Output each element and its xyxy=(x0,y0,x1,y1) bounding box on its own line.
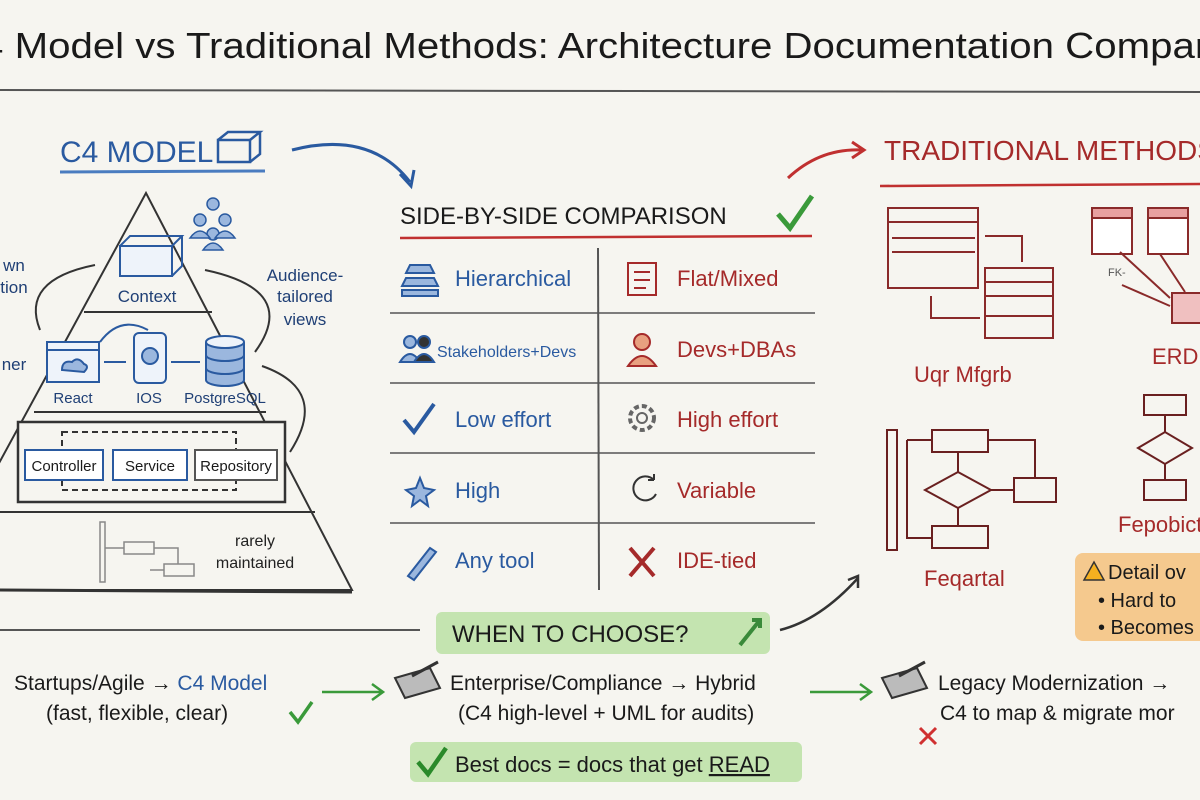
pyramid xyxy=(0,193,352,592)
people icon xyxy=(190,198,235,250)
text: FK- xyxy=(1108,267,1126,279)
pyramid labels: views xyxy=(284,310,326,329)
callout: best docs xyxy=(410,742,802,782)
pyramid labels: rarely xyxy=(235,533,275,550)
comparison table: Variable xyxy=(677,478,756,503)
pyramid labels: tion xyxy=(0,278,28,297)
pyramid labels: Context xyxy=(118,287,177,306)
small code diagram xyxy=(100,522,194,582)
pyramid labels: ner xyxy=(2,355,27,374)
arrow: to traditional bottom xyxy=(780,576,858,630)
heading: C4 model xyxy=(60,132,265,172)
bottom recommendations: Startups/Agile → C4 Model xyxy=(14,672,267,695)
bottom recommendations: C4 to map & migrate mor xyxy=(940,702,1175,725)
laptop icons xyxy=(395,662,927,698)
comparison table: High effort xyxy=(677,407,778,432)
react browser xyxy=(47,342,99,382)
pyramid labels: IOS xyxy=(136,390,162,407)
comparison table: Flat/Mixed xyxy=(677,266,778,291)
green arrows xyxy=(322,684,871,700)
pyramid labels: wn xyxy=(2,256,25,275)
callout: warnings: Detail ov xyxy=(1108,562,1186,584)
comparison table: Hierarchical xyxy=(455,266,571,291)
pyramid labels: PostgreSQL xyxy=(184,390,266,407)
traditional labels: ERD xyxy=(1152,344,1198,369)
bottom recommendations: Enterprise/Compliance → Hybrid xyxy=(450,672,756,695)
comparison heading: SIDE-BY-SIDE COMPARISON xyxy=(400,203,727,230)
comparison table xyxy=(390,248,815,590)
traditional labels: Fepobict xyxy=(1118,512,1200,537)
pyramid labels xyxy=(0,256,343,572)
flowchart left xyxy=(887,430,1056,550)
bottom recommendations: (fast, flexible, clear) xyxy=(46,702,228,725)
comparison table: IDE-tied xyxy=(677,548,756,573)
flowchart right xyxy=(1138,395,1192,500)
callout: warnings xyxy=(1075,553,1200,641)
pyramid labels: tailored xyxy=(277,287,333,306)
database xyxy=(206,336,244,386)
comparison table: Low effort xyxy=(455,407,551,432)
ios phone xyxy=(134,333,166,383)
traditional labels: Uqr Mfgrb xyxy=(914,362,1012,387)
bottom recommendations: (C4 high-level + UML for audits) xyxy=(458,702,754,725)
left icons xyxy=(400,265,438,580)
traditional labels: Feqartal xyxy=(924,566,1005,591)
context cube xyxy=(120,236,182,276)
pyramid labels: React xyxy=(53,390,93,407)
arrow: c4 to comparison xyxy=(292,144,414,186)
when to choose: WHEN TO CHOOSE? xyxy=(452,621,688,648)
uml diagram xyxy=(888,208,1053,338)
callout: warnings: • Becomes xyxy=(1098,617,1194,639)
arrow: to traditional xyxy=(788,142,864,178)
bottom recommendations: Legacy Modernization → xyxy=(938,672,1170,695)
pyramid labels: Repository xyxy=(200,458,272,475)
traditional labels xyxy=(914,344,1200,591)
erd xyxy=(1092,208,1200,323)
comparison table: Any tool xyxy=(455,548,534,573)
pyramid labels: Controller xyxy=(31,458,97,475)
when to choose xyxy=(0,612,770,654)
comparison table: Stakeholders+Devs xyxy=(437,344,576,361)
comparison table: High xyxy=(455,478,500,503)
component box xyxy=(18,422,285,502)
pyramid labels: Audience- xyxy=(267,266,343,285)
comparison heading xyxy=(400,196,812,238)
pyramid labels: Service xyxy=(125,458,175,475)
callout: best docs: Best docs = docs that get READ xyxy=(455,752,770,777)
pyramid labels: maintained xyxy=(216,555,294,572)
comparison table: Devs+DBAs xyxy=(677,337,796,362)
heading: C4 model: C4 MODEL xyxy=(60,136,213,169)
callout: warnings: • Hard to xyxy=(1098,590,1176,612)
right icons xyxy=(628,263,656,576)
bottom recommendations xyxy=(14,672,1175,744)
